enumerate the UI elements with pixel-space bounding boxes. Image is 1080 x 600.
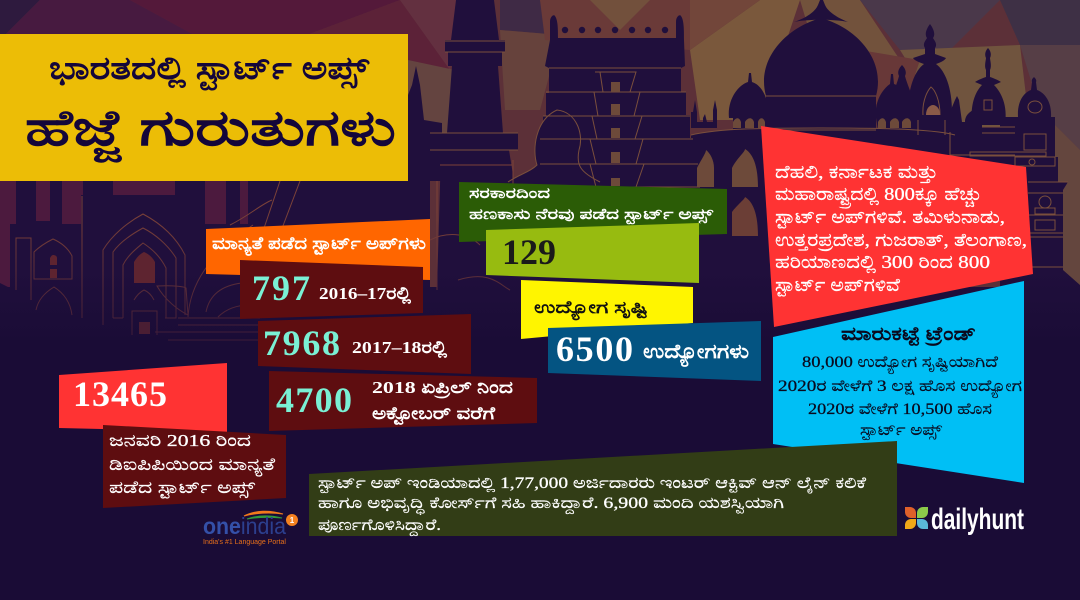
panel: 6500 jobs stat [548,321,761,381]
monument tan lines [430,41,1068,267]
panel: government funding heading [459,182,727,242]
panel: 13465 description: ಡಿಐಪಿಪಿಯಿಂದ ಮಾನ್ಯತೆ [109,455,275,477]
silhouette: arcade and central mausoleum [691,128,965,290]
monument window accents [611,82,940,236]
panel: 13465 stat: 13465 [73,374,167,414]
logo: oneindia: oneindia [203,513,286,539]
silhouette: temple A [908,24,952,130]
silhouette: statue [508,110,640,290]
panel: regional startups: ಸ್ಟಾರ್ಟ್ ಅಪ್‌ಗಳಿವೆ [775,275,900,297]
logo: dailyhunt [905,503,1024,536]
panel: 797 stat: 2016–17ರಲ್ಲಿ [319,284,412,305]
panel: 4700 stat: 4700 [276,380,352,420]
panel: 129 stat [486,223,699,283]
panel: 6500 jobs stat: ಉದ್ಯೋಗಗಳು [643,341,749,367]
logo: oneindia: 1 [290,516,295,525]
panel: 4700 stat: 2018 ಏಪ್ರಿಲ್ ನಿಂದ [372,378,513,399]
panel: government funding heading: ಹಣಕಾಸು ನೆರವು ಪಡೆದ ಸ್ಟಾರ್ಟ್ ಅಪ್ಸ್ [469,207,715,225]
panel: regional startups: ಸ್ಟಾರ್ಟ್ ಅಪ್‌ಗಳಿವೆ. ತಮಿಳುನಾಡು, [775,207,1005,229]
silhouette: temple B and shrine [972,48,1006,125]
panel: job creation heading [521,280,693,339]
panel: regional startups [761,126,1033,327]
panel: Startup India learning: ಪೂರ್ಣಗೊಳಿಸಿದ್ದಾರೆ. [318,517,441,536]
panel: 4700 stat: ಅಕ್ಟೋಬರ್ ವರೆಗೆ [372,404,497,426]
panel: government funding heading: ಸರಕಾರದಿಂದ [469,186,550,202]
panel: 7968 stat: 2017–18ರಲ್ಲಿ [352,338,448,359]
panel: 13465 description [103,425,286,508]
panel: market trend: 80,000 ಉದ್ಯೋಗ ಸೃಷ್ಟಿಯಾಗಿದೆ [802,354,998,374]
panel: regional startups: ಹರಿಯಾಣದಲ್ಲಿ 300 ರಿಂದ 800 [775,252,990,273]
fort window accents [50,252,155,334]
panel: 7968 stat: 7968 [263,323,340,363]
panel: Startup India learning [309,441,897,536]
panel: 797 stat [240,260,423,319]
title banner: ಹೆಜ್ಜೆ ಗುರುತುಗಳು [25,100,396,163]
panel: job creation heading: ಉದ್ಯೋಗ ಸೃಷ್ಟಿ [534,298,648,321]
background: low-poly sky [0,0,1080,300]
silhouette: left fort [0,181,430,300]
panel: market trend [773,281,1024,483]
background: monument silhouettes [0,0,1080,347]
title banner [0,34,408,181]
panel: market trend: 2020ರ ವೇಳೆಗೆ 10,500 ಹೊಸ [808,401,992,418]
logo: oneindia [203,511,298,546]
panel: 4700 stat [269,371,537,431]
silhouette: small domes [729,73,768,130]
logo: dailyhunt: dailyhunt [931,503,1024,536]
panel: 6500 jobs stat: 6500 [556,329,633,369]
silhouette: gopuram [540,15,700,290]
panel: 129 stat: 129 [502,232,556,272]
panel: Startup India learning: ಹಾಗೂ ಅಭಿವೃದ್ಧಿ ಕೋರ್ಸ್‌ಗೆ ಸಹಿ ಹಾಕಿದ್ದಾರೆ. 6,900 ಮಂದಿ ಯಶಸ್ವಿಯಾಗಿ [318,495,784,516]
panel: regional startups: ದೆಹಲಿ, ಕರ್ನಾಟಕ ಮತ್ತು [775,162,938,184]
panel: recognised startups heading: ಮಾನ್ಯತೆ ಪಡೆದ ಸ್ಟಾರ್ಟ್ ಅಪ್‌ಗಳು [212,234,427,257]
panel: regional startups: ಉತ್ತರಪ್ರದೇಶ, ಗುಜರಾತ್, ತೆಲಂಗಾಣ, [775,230,1027,251]
monument outline strokes [16,160,513,340]
panel: recognised startups heading [206,219,430,280]
panel: 7968 stat [258,314,471,374]
panel: 13465 description: ಪಡೆದ ಸ್ಟಾರ್ಟ್ ಅಪ್ಸ್ [109,478,256,499]
silhouette: minaret tower [430,0,518,290]
silhouette: small dome by tower [408,66,442,181]
panel: 13465 stat [59,363,227,432]
panel: 797 stat: 797 [252,268,310,308]
panel: market trend: ಮಾರುಕಟ್ಟೆ ಟ್ರೆಂಡ್ [841,324,976,347]
panel: Startup India learning: ಸ್ಟಾರ್ಟ್ ಅಪ್ ಇಂಡಿಯಾದಲ್ಲಿ 1,77,000 ಅರ್ಜಿದಾರರು ಇಂಟರ್ ಆಕ್ಟಿವ್ ಆನ್ ಲೈನ್ ಕಲಿಕೆ [318,475,866,494]
panel: market trend: 2020ರ ವೇಳೆಗೆ 3 ಲಕ್ಷ ಹೊಸ ಉದ್ಯೋಗ [778,378,1022,398]
panel: regional startups: ಮಹಾರಾಷ್ಟ್ರದಲ್ಲಿ 800ಕ್ಕೂ ಹೆಚ್ಚು [775,184,982,208]
panel: market trend: ಸ್ಟಾರ್ಟ್ ಅಪ್ಸ್ [860,422,943,441]
title banner: ಭಾರತದಲ್ಲಿ ಸ್ಟಾರ್ಟ್ ಅಪ್ಸ್ [49,50,370,90]
silhouette: temple C [1000,77,1080,300]
panel: 13465 description: ಜನವರಿ 2016 ರಿಂದ [109,431,251,450]
logo: oneindia: India's #1 Language Portal [203,537,286,546]
